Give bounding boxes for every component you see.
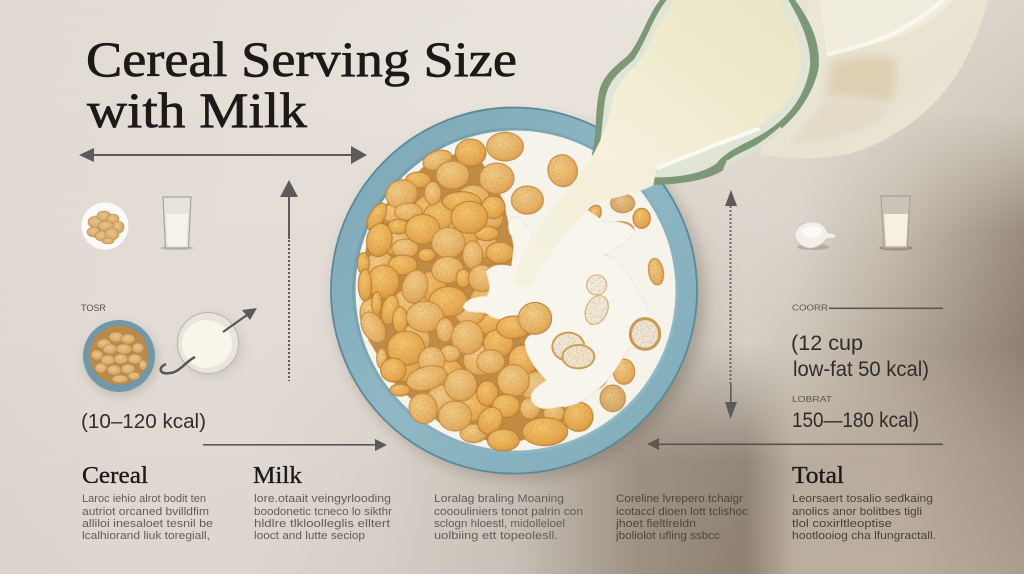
- text: cereal calories: (10–120 kcal): [81, 411, 206, 433]
- icon: small pitcher: [795, 222, 836, 250]
- panel: cereal: alliloi inesaloet tesnil be: [82, 518, 213, 530]
- panel: total: Total: [792, 463, 844, 489]
- panel: milk: boodonetic tcneco lo sikthr: [254, 506, 392, 518]
- pile of flakes: [356, 132, 666, 451]
- panel: total: Leorsaert tosalio sedkaing: [792, 493, 933, 505]
- bowl with cereal and milk: [331, 100, 704, 478]
- text: total calories: 150—180 kcal): [792, 409, 919, 432]
- bowl shadow: [336, 118, 704, 478]
- panel: middle text one: cooouliniers tonot palrin con: [434, 506, 583, 518]
- milk surface: [356, 130, 676, 450]
- panel: middle text two: jhoet fieltlreldn: [615, 518, 696, 530]
- panel: total: hootlooiog cha lfungractall.: [792, 530, 936, 542]
- panel: milk: hldlre tlkloolleglis elltert: [254, 518, 390, 530]
- icon: glass of milk right: [879, 196, 913, 250]
- panel: middle text one: sclogn hloestl, midolleloel: [434, 518, 565, 530]
- text: milk serving: [791, 332, 929, 381]
- panel: middle text two: [615, 493, 749, 542]
- panel: total: [792, 463, 936, 542]
- text: milk serving: low-fat 50 kcal): [793, 358, 929, 381]
- panel: middle text two: icotaccl dioen lott tclishoc: [616, 506, 749, 518]
- panel: cereal: lcalhiorand liuk toregiall,: [82, 530, 210, 542]
- milk jug: [553, 0, 988, 213]
- label with line: COORR: COORR: [792, 302, 828, 312]
- jug lower arc glass: [727, 128, 782, 163]
- milk stream: [515, 100, 703, 287]
- panel: milk: lore.otaait veingyrlooding: [254, 493, 391, 505]
- jug body lighter top band: [820, 0, 953, 55]
- jug mouth rim: [592, 0, 819, 185]
- title: [86, 31, 517, 138]
- arrow: curved connector: [161, 357, 195, 373]
- panel: total: tlol coxirltleoptise: [792, 518, 892, 530]
- arrow: bottom right arrow: [647, 438, 943, 450]
- label: TOSR: TOSR: [81, 303, 106, 313]
- panel: milk: [253, 463, 392, 542]
- text: milk serving: (12 cup: [791, 332, 863, 355]
- jug lower body shade: [790, 99, 888, 143]
- arrow: milk cup up-right arrow: [223, 308, 257, 332]
- panel: cereal: Laroc iehio alrot bodit ten: [82, 493, 206, 505]
- jug glass lip: [598, 0, 810, 177]
- title: Cereal Serving Size: [86, 31, 517, 87]
- panel: cereal: [82, 463, 213, 542]
- panel: middle text two: Coreline lvrepero tchaigr: [616, 493, 743, 505]
- flakes over splash: [497, 275, 660, 368]
- panel: total: anolics anor bolitbes tigli: [792, 506, 922, 518]
- panel: middle text one: Loralag braling Moaning: [434, 493, 564, 505]
- arrow: top horizontal double arrow: [79, 146, 367, 164]
- arrow: left vertical dotted arrow: [280, 180, 298, 381]
- title: with Milk: [87, 82, 307, 138]
- panel: middle text two: jboliolot ufling ssbcc: [615, 530, 721, 542]
- icon: milk cup: [178, 312, 242, 377]
- panel: milk: Milk: [253, 463, 302, 489]
- icon: cereal plate: [82, 202, 128, 250]
- milk splash: [463, 200, 655, 408]
- icon: glass of milk left: [160, 197, 194, 250]
- icon: small cereal bowl: [83, 320, 158, 396]
- jug body: [760, 0, 988, 158]
- jug inner shaded milk: [827, 56, 896, 103]
- panel: middle text one: [434, 493, 583, 542]
- spout milk outflow: [553, 157, 657, 213]
- jug milk surface: [590, 0, 802, 170]
- arrow: bottom left arrow: [203, 439, 387, 451]
- jug spout highlight: [657, 128, 760, 168]
- label: LOBRAT: LOBRAT: [792, 394, 832, 404]
- bowl rim: [331, 108, 697, 474]
- panel: milk: looct and lutte seciop: [254, 530, 365, 542]
- panel: cereal: Cereal: [82, 463, 148, 489]
- panel: cereal: autriot orcaned bvilldfim: [82, 506, 209, 518]
- arrow: right vertical dotted arrow: [725, 190, 737, 419]
- panel: middle text one: uolbiing ett topeolesll.: [434, 530, 558, 542]
